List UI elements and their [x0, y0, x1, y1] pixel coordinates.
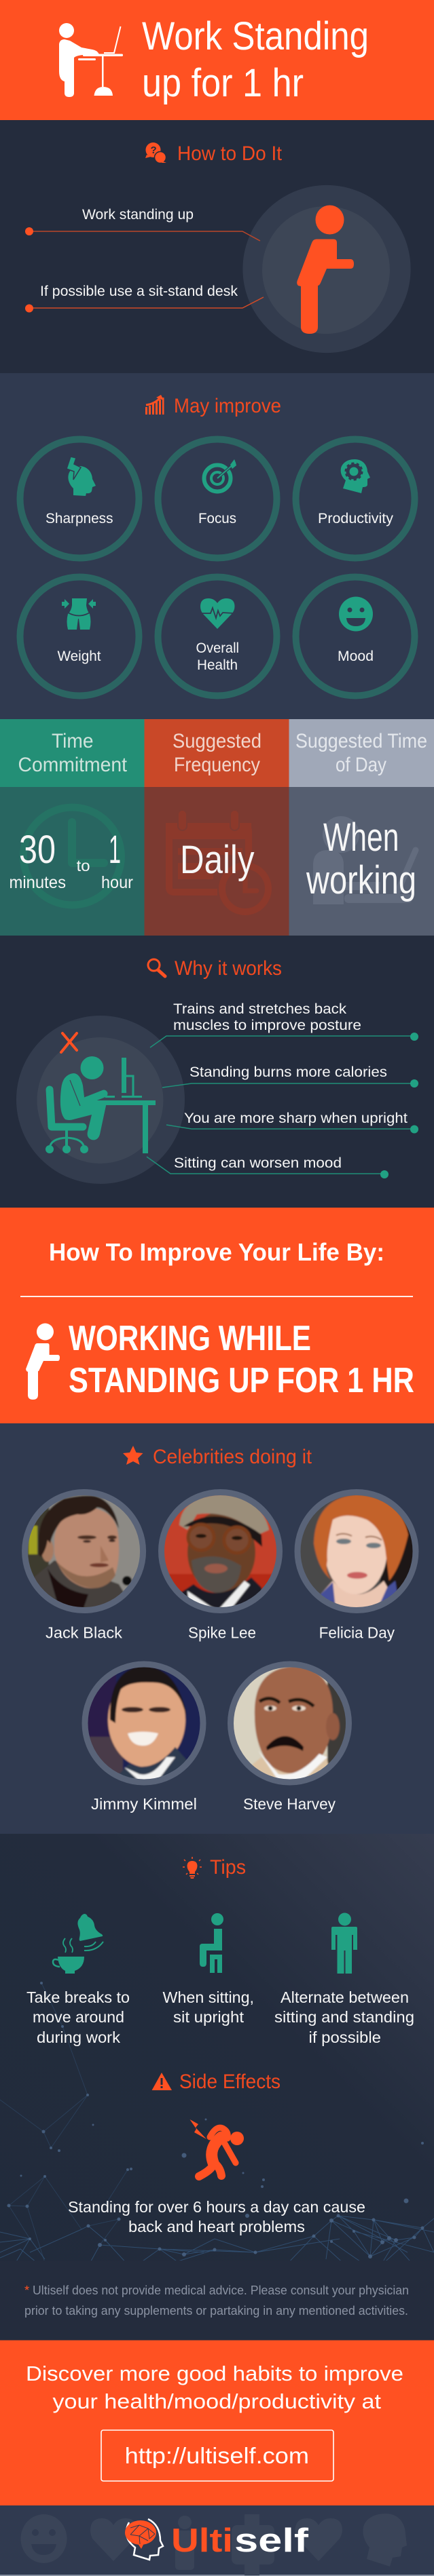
- label: suggested time of day: [295, 730, 427, 776]
- url button: [101, 2430, 333, 2481]
- tip: take breaks: move around: [33, 2008, 124, 2026]
- icon: standing person: [26, 1323, 60, 1400]
- panel: disclaimer: [0, 2261, 434, 2341]
- celebrity names: Steve Harvey: [243, 1795, 336, 1813]
- value: daily: Daily: [180, 838, 254, 882]
- heading: celebrities: Celebrities doing it: [153, 1446, 312, 1468]
- value: when working: [306, 815, 416, 902]
- portrait: felicia day: [295, 1489, 419, 1618]
- headline: WORKING WHILE: [69, 1319, 311, 1358]
- tip: take breaks: Take breaks to: [26, 1988, 130, 2006]
- panel: call to action: Discover more good habits to improve: [26, 2362, 403, 2385]
- label: suggested frequency: Frequency: [174, 754, 260, 776]
- heading: why it works: Why it works: [175, 957, 282, 980]
- panel: disclaimer: prior to taking any supplements or partaking in any mentioned activities.: [24, 2303, 408, 2318]
- callout: sharp: [166, 1111, 418, 1133]
- callout: calories: Standing burns more calories: [189, 1064, 387, 1080]
- label: suggested frequency: [173, 730, 261, 776]
- seated figure in concentric circles: [16, 1016, 185, 1184]
- panel: why it works: [0, 936, 434, 1208]
- header banner: [0, 0, 434, 120]
- headline: [69, 1319, 414, 1400]
- tip: alternate: sitting and standing: [274, 2008, 414, 2026]
- benefit: sharpness: [20, 440, 139, 558]
- benefit: weight: Weight: [57, 649, 101, 664]
- benefit: overall health: Health: [197, 657, 238, 673]
- tip: sit upright: [163, 1913, 254, 2026]
- value: 30 minutes to 1 hour: [10, 828, 133, 892]
- callout: posture: Trains and stretches back: [173, 1001, 347, 1017]
- benefit: productivity: [296, 440, 414, 558]
- celebrity names: Felicia Day: [319, 1624, 395, 1642]
- side effect text: Standing for over 6 hours a day can cause: [68, 2198, 365, 2216]
- panel: tips and side effects: [0, 1834, 434, 2266]
- side effect text: [68, 2198, 365, 2235]
- callout: work standing up: Work standing up: [82, 207, 194, 223]
- panel: suggested frequency: [144, 719, 289, 936]
- value: 30 minutes to 1 hour: minutes: [10, 873, 66, 892]
- callout: work standing up: [25, 207, 260, 241]
- callout: sit-stand desk: [25, 284, 264, 312]
- callout: posture: [150, 1001, 418, 1047]
- benefit: mood: [296, 577, 414, 696]
- panel: disclaimer: *: [24, 2283, 29, 2297]
- celebrity names: Spike Lee: [188, 1624, 256, 1642]
- heading: how to do it: ?: [151, 145, 157, 156]
- title: Work Standing: [142, 14, 369, 58]
- label: suggested frequency: Suggested: [173, 730, 261, 752]
- heading: tips: Tips: [210, 1856, 246, 1879]
- heading: how to do it: How to Do It: [177, 142, 283, 165]
- logo: [125, 2519, 309, 2560]
- panel: celebrities doing it: [0, 1423, 434, 1834]
- side effect text: back and heart problems: [128, 2218, 305, 2235]
- icon: seated person at desk: [46, 1056, 156, 1153]
- panel: call to action: your health/mood/productivity at: [53, 2389, 381, 2413]
- portrait: jimmy kimmel: [82, 1661, 206, 1788]
- callout: posture: muscles to improve posture: [173, 1018, 361, 1033]
- icon: standing person: [331, 1913, 357, 1974]
- heading: side effects: Side Effects: [179, 2071, 281, 2093]
- value: 30 minutes to 1 hour: hour: [101, 873, 133, 892]
- benefit: focus: Focus: [198, 511, 236, 526]
- logo: Ulti: [171, 2522, 233, 2559]
- panel: time commitment: [0, 719, 144, 936]
- icon: faint calendar with clock: [166, 810, 268, 912]
- portrait: jack black: [22, 1489, 146, 1618]
- panel: disclaimer: Ultiself does not provide medical advice. Please consult your physician: [33, 2283, 409, 2297]
- benefit: overall health: Overall: [196, 640, 239, 656]
- tip: take breaks: [26, 1914, 130, 2046]
- celebrity names: Jack Black: [46, 1624, 122, 1642]
- tip: take breaks: during work: [37, 2029, 121, 2046]
- icon: bell and coffee cup: [53, 1914, 103, 1974]
- value: when working: When: [323, 815, 399, 860]
- heading: tips: [183, 1856, 246, 1879]
- portrait: steve harvey: [228, 1661, 352, 1788]
- label: time commitment: Time: [52, 730, 94, 752]
- value: 30 minutes to 1 hour: 1: [109, 828, 121, 872]
- url button: http://ultiself.com: [125, 2443, 309, 2468]
- benefit: weight: [20, 577, 139, 696]
- callout: sit-stand desk: If possible use a sit-stand desk: [40, 284, 238, 299]
- panel: how to improve your life: [0, 1208, 434, 1423]
- logo: self: [234, 2522, 309, 2559]
- icon: faint person at laptop: [313, 816, 416, 904]
- panel: may improve: [0, 373, 434, 719]
- label: suggested time of day: of Day: [336, 754, 386, 776]
- icon: person with back pain: [190, 2119, 244, 2176]
- subheading: How To Improve Your Life By:: [49, 1238, 384, 1266]
- tip: sit upright: sit upright: [173, 2008, 245, 2026]
- icon: faint clock: [23, 807, 121, 905]
- panel: suggested time of day: [289, 719, 434, 936]
- tip: alternate: if possible: [308, 2029, 381, 2046]
- benefit: overall health: [158, 577, 277, 696]
- benefit: focus: [158, 440, 277, 558]
- celebrity names: [46, 1624, 395, 1813]
- panel: footer logo: [0, 2505, 434, 2576]
- title: [142, 14, 369, 105]
- portrait: spike lee: [158, 1489, 283, 1615]
- title: up for 1 hr: [142, 61, 304, 105]
- label: time commitment: [18, 730, 128, 776]
- benefit: productivity: Productivity: [318, 511, 394, 526]
- callout: mood: Sitting can worsen mood: [174, 1155, 342, 1171]
- callout: sharp: You are more sharp when upright: [184, 1111, 408, 1126]
- standing figure in concentric circles: [242, 185, 411, 353]
- icon: red cross: [61, 1033, 77, 1052]
- label: time commitment: Commitment: [18, 754, 128, 776]
- callout: calories: [162, 1064, 418, 1088]
- panel: how to do it: [0, 120, 434, 373]
- benefit: mood: Mood: [338, 649, 374, 664]
- icon: sitting person: [200, 1913, 223, 1973]
- tip: alternate: Alternate between: [281, 1988, 409, 2006]
- icon: person at standing desk: [59, 23, 123, 97]
- value: 30 minutes to 1 hour: 30: [19, 828, 56, 872]
- panel: call to action: [0, 2341, 434, 2505]
- tip: sit upright: When sitting,: [163, 1988, 254, 2006]
- celebrity names: Jimmy Kimmel: [91, 1795, 197, 1813]
- callout: mood: [147, 1155, 388, 1178]
- value: 30 minutes to 1 hour: to: [77, 857, 90, 874]
- tip: alternate: [274, 1913, 414, 2046]
- benefit: sharpness: Sharpness: [46, 511, 113, 526]
- heading: may improve: May improve: [174, 395, 281, 417]
